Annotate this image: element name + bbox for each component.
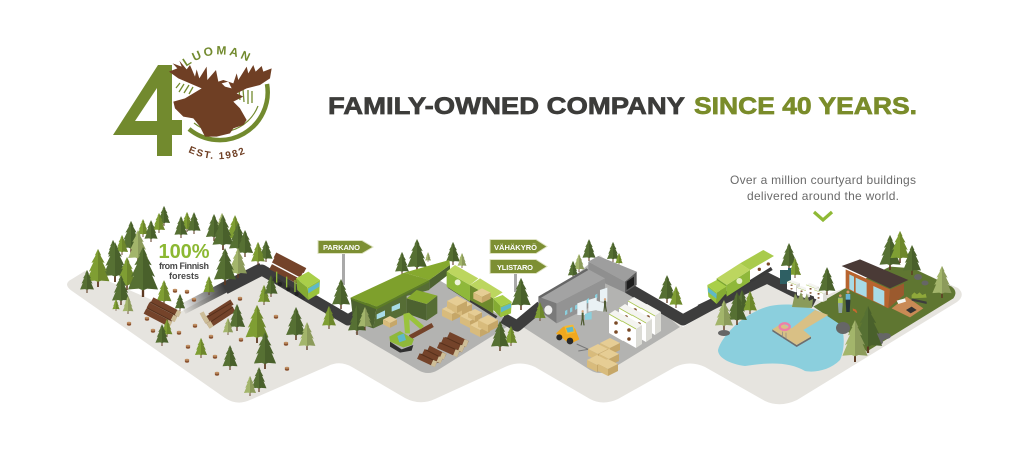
cabin <box>842 259 927 317</box>
callout line 1: Over a million courtyard buildings <box>730 173 916 187</box>
small packages <box>787 280 827 302</box>
crates: sawmill <box>383 296 498 337</box>
sign text Vähäkyrö: VÄHÄKYRÖ <box>494 243 537 252</box>
logo wood ring <box>174 46 268 140</box>
logo numeral 4 <box>113 65 182 156</box>
factory buildings <box>538 256 637 323</box>
yard: sawmill <box>355 272 513 373</box>
sign text Parkano: PARKANO <box>323 243 360 252</box>
lake <box>718 304 844 372</box>
background trees: factory <box>568 239 683 308</box>
heading <box>328 93 917 120</box>
heading green part: SINCE 40 YEARS. <box>694 93 917 120</box>
road: final <box>700 278 815 310</box>
background trees: sawmill <box>322 239 466 329</box>
lake trees and rocks <box>715 290 757 336</box>
forest trees <box>80 206 273 314</box>
percent caption line 2: forests <box>169 271 199 281</box>
sign text Ylistaro: YLISTARO <box>497 263 533 272</box>
road: forest fade <box>183 268 262 309</box>
signpost: Parkano <box>318 240 373 285</box>
small forklift <box>780 268 791 288</box>
log pile: left <box>145 300 180 324</box>
crates: factory <box>587 338 620 376</box>
grass courtyard <box>813 267 955 352</box>
logo moose head <box>169 61 272 137</box>
callout: courtyard buildings <box>730 173 916 203</box>
callout line 2: delivered around the world. <box>747 189 899 203</box>
heading dark part: FAMILY-OWNED COMPANY <box>328 93 685 120</box>
forklift <box>556 325 588 351</box>
label: 100% from Finnish forests <box>158 241 210 281</box>
foreground trees <box>842 306 882 362</box>
tree in front of factory <box>534 302 546 321</box>
delivery truck <box>707 250 774 304</box>
logo text LUOMAN: LUOMAN <box>182 46 250 66</box>
yard: factory <box>520 257 680 373</box>
log truck <box>271 255 320 300</box>
tree stumps <box>127 289 289 376</box>
logo: Luoman 40 <box>113 46 272 160</box>
white packages <box>609 297 661 348</box>
dock <box>772 310 828 347</box>
icon: chevron down <box>814 212 832 220</box>
percent caption line 1: from Finnish <box>159 261 209 271</box>
sawmill building <box>351 260 450 328</box>
road network <box>183 268 815 326</box>
signposts: Vähäkyrö and Ylistaro <box>490 240 547 292</box>
log pile: right <box>201 302 234 326</box>
logo text EST. 1982: EST. 1982 <box>188 146 245 160</box>
courtyard trees <box>879 231 952 298</box>
ground base <box>67 255 962 404</box>
glass panels and workers <box>577 288 607 325</box>
near forest trees <box>155 275 315 396</box>
road: to factory <box>503 306 541 326</box>
truck: sawmill <box>447 265 512 317</box>
log piles: sawmill <box>418 335 467 364</box>
road: factory to lake <box>628 288 720 320</box>
garden rocks <box>836 274 928 345</box>
percent figure: 100% <box>158 241 210 263</box>
road: to sawmill <box>225 270 372 320</box>
trees and packages by the lake <box>780 243 835 302</box>
reeds <box>792 292 813 308</box>
yard trees: sawmill <box>348 278 531 351</box>
people and dog <box>838 290 857 313</box>
excavator <box>389 313 433 353</box>
